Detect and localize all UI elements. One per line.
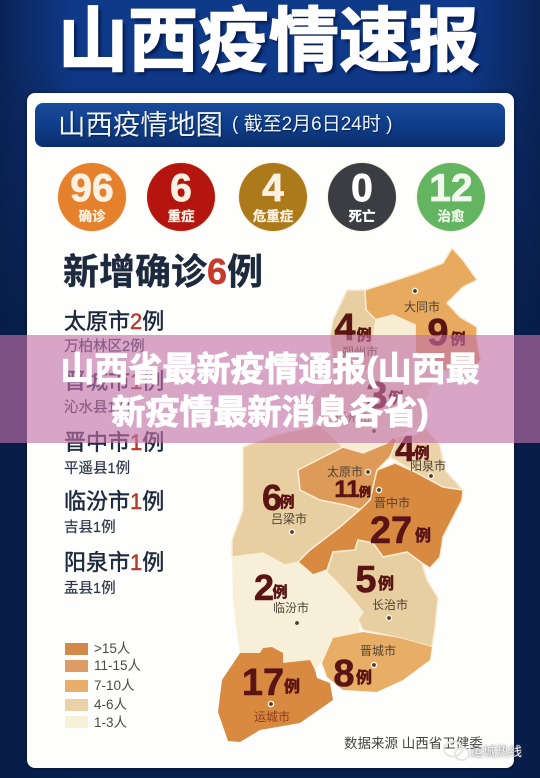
banner headline	[60, 351, 480, 432]
map labels: 例	[279, 494, 295, 511]
panel: main white card	[27, 93, 514, 768]
watermark text: 运城热线	[470, 744, 522, 759]
city markers	[268, 288, 434, 707]
heading bar: map title: ( 截至2月6日24时 )	[232, 114, 392, 135]
map labels: 例	[272, 584, 288, 601]
map labels: 例	[284, 678, 300, 696]
legend	[65, 641, 141, 730]
city names: 太原市	[327, 464, 363, 479]
city names: 临汾市	[273, 600, 309, 615]
data source note: 数据来源 山西省卫健委	[344, 736, 483, 751]
city names: 晋中市	[374, 495, 410, 510]
stat: critical 4: 危重症	[253, 209, 293, 224]
title: 山西疫情速报	[58, 2, 480, 80]
stat: confirmed 96	[58, 163, 126, 231]
legend: 1-3人	[94, 715, 127, 730]
region: Changzhi	[327, 540, 438, 647]
stat: cured 12: 12	[429, 167, 473, 210]
map labels: 4	[395, 428, 415, 469]
banner headline: 新疫情最新消息各省)	[111, 394, 429, 432]
list: new cases by city: 晋城市1例	[64, 369, 164, 394]
city names: 运城市	[254, 709, 290, 724]
stat: critical 4	[239, 163, 307, 231]
map labels: 例	[388, 390, 404, 407]
list: new cases by city: 晋中市1例	[64, 430, 164, 455]
list: new cases by city: 沁水县1例	[64, 400, 130, 416]
list: new cases by city: 太原市2例	[64, 309, 164, 334]
map labels: 例	[356, 327, 372, 344]
region: Jincheng	[322, 632, 432, 692]
map labels: 5	[355, 559, 377, 601]
map labels: 例	[378, 575, 394, 593]
list: new cases by city: 平遥县1例	[64, 461, 130, 477]
list: new cases by city: 盂县1例	[64, 581, 116, 597]
legend: 4-6人	[94, 697, 127, 712]
city names: 阳泉市	[410, 458, 446, 473]
city names: 晋城市	[360, 643, 396, 658]
heading: new confirmed: 新增确诊6例	[63, 251, 263, 292]
map labels: 27	[370, 510, 412, 552]
stat: confirmed 96: 96	[70, 167, 114, 210]
legend: 7-10人	[94, 678, 135, 693]
icon: wechat watermark	[443, 740, 470, 761]
list: new cases by city: 吉县1例	[64, 520, 116, 536]
map labels: 例	[356, 669, 372, 687]
region: Lvliang	[232, 425, 362, 565]
map labels: 6	[262, 477, 282, 518]
stat: severe 6: 6	[170, 167, 192, 210]
map labels: 例	[450, 331, 466, 348]
list: new cases by city: 临汾市1例	[64, 489, 164, 514]
stat: severe 6	[147, 163, 215, 231]
stat: cured 12: 治愈	[438, 209, 464, 224]
list: new cases by city: 阳泉市1例	[64, 550, 164, 575]
map labels: 例	[414, 445, 430, 462]
region: Xinzhou	[310, 315, 440, 453]
stat: severe 6: 重症	[168, 209, 194, 224]
city names: 大同市	[404, 299, 440, 314]
legend: >15人	[94, 641, 130, 656]
region: Yuncheng	[218, 647, 333, 742]
map labels: 例	[415, 527, 431, 545]
heading bar: map title	[35, 103, 505, 147]
map labels: 9	[427, 312, 449, 354]
stat: critical 4: 4	[262, 167, 284, 210]
region: Yangquan	[390, 428, 463, 490]
stat: cured 12	[417, 163, 485, 231]
banner: overlay band	[0, 335, 540, 443]
region: Jinzhong	[298, 463, 463, 575]
stat: deaths 0: 0	[351, 167, 373, 210]
map labels: 例	[359, 485, 371, 499]
map labels: 17	[242, 662, 284, 704]
map labels: 2	[254, 567, 274, 608]
stat: deaths 0	[328, 163, 396, 231]
heading bar: map title: 山西疫情地图	[58, 109, 223, 140]
list: new cases by city	[64, 309, 164, 597]
region: Datong	[365, 248, 481, 372]
banner headline: 山西省最新疫情通报(山西最	[60, 351, 480, 389]
legend: 11-15人	[94, 658, 141, 673]
stat: confirmed 96: 确诊	[78, 209, 106, 224]
region: Taiyuan	[298, 437, 397, 510]
city names: 忻州市	[335, 410, 371, 425]
map labels: 4	[334, 307, 356, 349]
map labels: 8	[333, 653, 355, 695]
stat: deaths 0: 死亡	[348, 209, 376, 224]
map labels: 3	[366, 375, 388, 417]
city names	[254, 299, 446, 724]
city names: 长治市	[372, 597, 408, 612]
map labels	[242, 307, 466, 704]
list: new cases by city: 万柏林区2例	[64, 339, 145, 355]
map labels: 11	[334, 476, 360, 503]
region: Linfen	[232, 553, 363, 670]
city names: 吕梁市	[271, 511, 307, 526]
city names: 朔州市	[342, 344, 378, 359]
region: Shuozhou	[330, 290, 376, 375]
